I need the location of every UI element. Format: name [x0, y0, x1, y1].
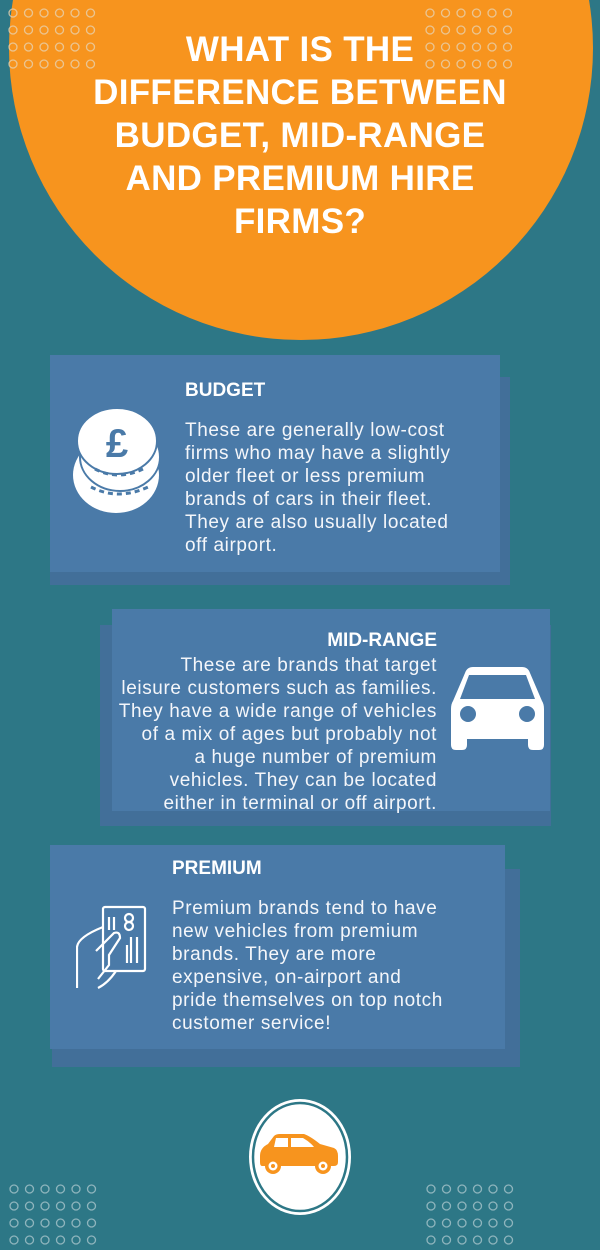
- heading: mid-range: MID-RANGE: [327, 630, 437, 651]
- text: budget: firms who may have a slightly: [185, 443, 451, 464]
- text: mid-range: vehicles. They can be located: [170, 770, 437, 791]
- icon: bottom car badge: [249, 1099, 351, 1215]
- title: AND PREMIUM HIRE: [126, 159, 474, 198]
- text: premium: Premium brands tend to have: [172, 898, 437, 919]
- text: premium: new vehicles from premium: [172, 921, 418, 942]
- icon: coins pound: £: [106, 422, 128, 466]
- panel: mid-range: [100, 609, 551, 826]
- icon: hand with card: [76, 906, 146, 989]
- text: budget: older fleet or less premium: [185, 466, 425, 487]
- text: budget: off airport.: [185, 535, 277, 556]
- icon: coins pound: [73, 409, 159, 513]
- panel: premium: [50, 845, 520, 1067]
- icon: car front: [451, 667, 544, 750]
- title: WHAT IS THE: [186, 30, 414, 69]
- orange header circle: [9, 0, 593, 340]
- text: mid-range: These are brands that target: [180, 655, 437, 676]
- title: BUDGET, MID-RANGE: [115, 116, 485, 155]
- text: budget: They are also usually located: [185, 512, 448, 533]
- text: budget: These are generally low-cost: [185, 420, 445, 441]
- text: budget: [185, 420, 451, 556]
- text: premium: brands. They are more: [172, 944, 376, 965]
- text: mid-range: either in terminal or off airport.: [164, 793, 437, 814]
- text: premium: customer service!: [172, 1013, 331, 1034]
- text: premium: [172, 898, 443, 1034]
- text: premium: expensive, on-airport and: [172, 967, 401, 988]
- heading: premium: PREMIUM: [172, 858, 262, 879]
- text: mid-range: of a mix of ages but probably not: [142, 724, 437, 745]
- text: mid-range: They have a wide range of vehicles: [119, 701, 437, 722]
- text: budget: brands of cars in their fleet.: [185, 489, 432, 510]
- text: mid-range: [119, 655, 437, 814]
- panel: budget: [50, 355, 510, 585]
- title: [93, 30, 507, 241]
- text: premium: pride themselves on top notch: [172, 990, 443, 1011]
- title: DIFFERENCE BETWEEN: [93, 73, 507, 112]
- text: mid-range: leisure customers such as families.: [121, 678, 437, 699]
- heading: budget: BUDGET: [185, 380, 265, 401]
- text: mid-range: a huge number of premium: [194, 747, 437, 768]
- title: FIRMS?: [234, 202, 366, 241]
